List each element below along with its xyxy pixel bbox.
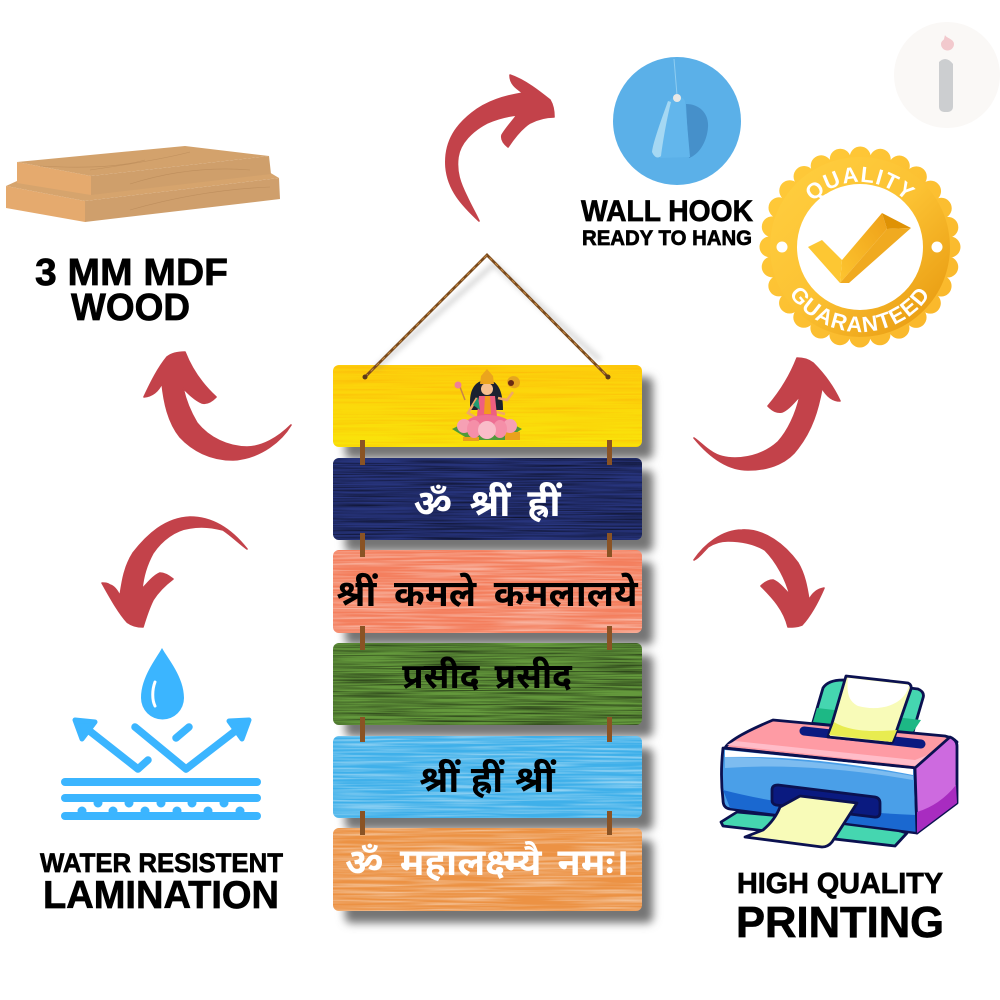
plank 2: navy mantra: ॐ श्रीं ह्रीं bbox=[413, 481, 562, 532]
plank 4: green mantra: प्रसीद प्रसीद bbox=[402, 656, 573, 703]
plank 1: yellow with goddess bbox=[333, 365, 642, 447]
heading: wall hook: WALL HOOK bbox=[581, 195, 753, 228]
icon: water resistant lamination bbox=[65, 648, 257, 816]
plank 4: green mantra bbox=[333, 643, 642, 725]
arrow: to lamination bbox=[102, 517, 247, 627]
heading: water resistent lamination: WATER RESISTENT bbox=[40, 848, 283, 878]
heading: high quality printing: PRINTING bbox=[736, 898, 944, 947]
icon: quality guaranteed badge bbox=[760, 146, 960, 348]
icon: wall hook bbox=[613, 57, 741, 185]
heading: 3 mm mdf wood bbox=[35, 252, 228, 329]
plank 6: orange mantra: ॐ महालक्ष्म्यै नमः। bbox=[345, 840, 629, 891]
heading: high quality printing: HIGH QUALITY bbox=[737, 868, 943, 900]
heading: water resistent lamination: LAMINATION bbox=[43, 874, 279, 917]
arrow: to wall hook bbox=[446, 75, 554, 221]
icon: quality guaranteed badge: GUARANTEED bbox=[792, 288, 927, 332]
arrow: to mdf wood bbox=[144, 352, 291, 460]
plank 3: salmon mantra bbox=[333, 550, 642, 633]
hanging rope bbox=[362, 255, 610, 380]
plank 3: salmon mantra: श्रीं कमले कमलालये bbox=[336, 572, 639, 622]
illustration: goddess on lotus bbox=[452, 369, 522, 441]
plank 5: sky blue mantra: श्रीं ह्रीं श्रीं bbox=[419, 758, 557, 808]
icon: printer bbox=[721, 676, 957, 847]
plank 2: navy mantra bbox=[333, 458, 642, 540]
arrow: to quality badge bbox=[694, 358, 840, 470]
heading: water resistent lamination bbox=[40, 848, 283, 917]
plank shadows bbox=[345, 377, 653, 923]
heading: 3 mm mdf wood: 3 MM MDF bbox=[35, 252, 228, 294]
connecting rods bbox=[360, 440, 612, 835]
watermark logo bbox=[894, 22, 1000, 128]
plank 5: sky blue mantra bbox=[333, 736, 642, 818]
arrow: to printing bbox=[694, 530, 824, 627]
icon: wood boards bbox=[6, 146, 280, 222]
plank 6: orange mantra bbox=[333, 828, 642, 911]
icon: quality guaranteed badge: QUALITY bbox=[806, 166, 916, 198]
heading: high quality printing bbox=[736, 868, 944, 947]
heading: 3 mm mdf wood: WOOD bbox=[71, 287, 190, 329]
heading: wall hook bbox=[581, 195, 753, 250]
heading: wall hook: READY TO HANG bbox=[582, 226, 752, 250]
